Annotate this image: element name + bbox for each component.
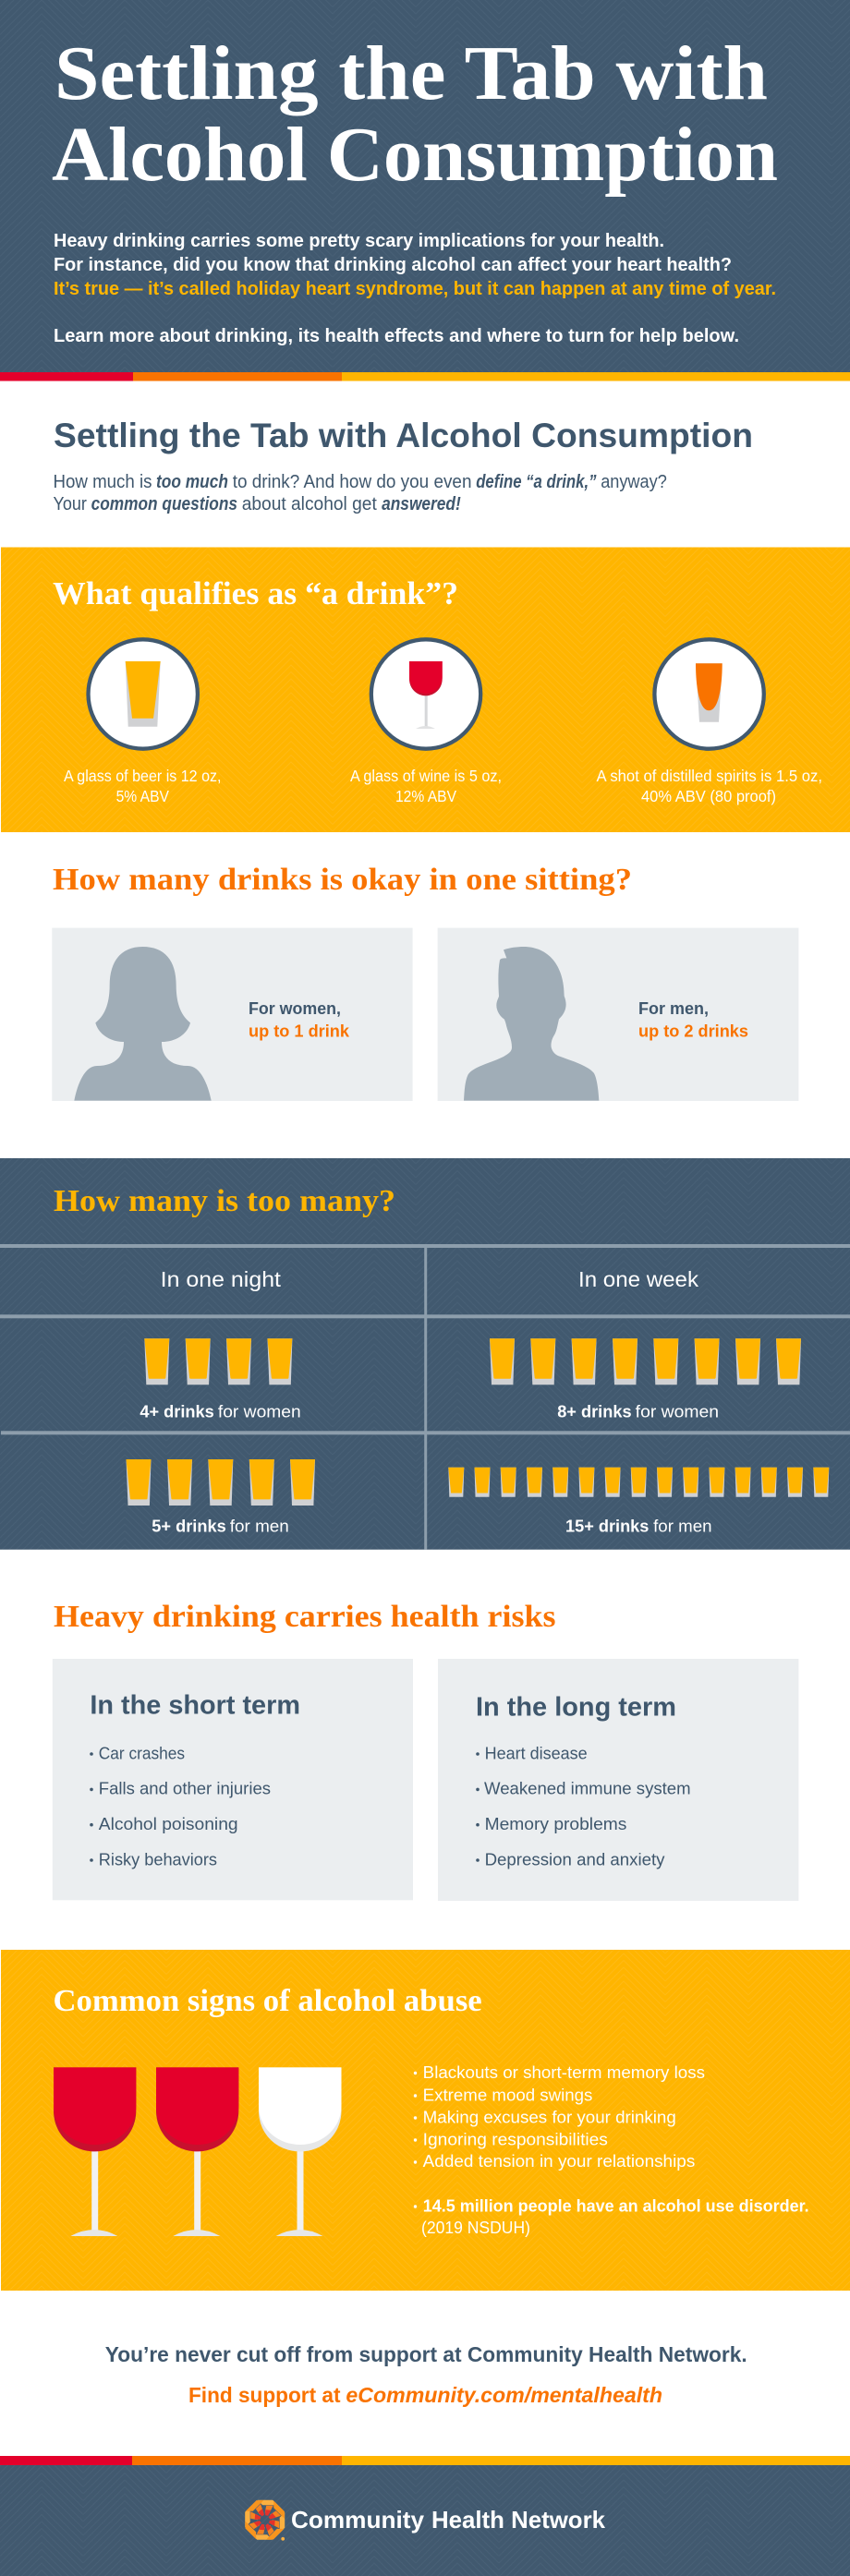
label: 5+ drinks for men: for men: [230, 1516, 289, 1535]
column heading: one week: In one week: [578, 1267, 698, 1291]
logo wordmark: [291, 2506, 606, 2534]
logo wordmark: Community: [291, 2506, 425, 2534]
caption: wine: [350, 767, 502, 805]
intro text: For instance, did you know that drinking alcohol can affect your heart health?: [54, 255, 732, 275]
icon: beer glass: [89, 639, 198, 749]
panel: women limit: [52, 928, 413, 1101]
heading: Common signs of alcohol abuse: [54, 1984, 482, 2018]
list: short term: Car crashes: [99, 1744, 185, 1762]
text: women limit: For women,: [249, 998, 341, 1018]
heading: How many is too many?: [54, 1184, 395, 1218]
intro questions text: How much is: [54, 472, 152, 492]
icon: wine glass: [371, 639, 480, 749]
label: 15+ drinks for men: 15+ drinks: [565, 1516, 649, 1535]
intro questions text: answered!: [382, 494, 461, 514]
list: short term: Falls and other injuries: [99, 1780, 271, 1798]
panel: page header: [0, 0, 850, 372]
label: 4+ drinks for women: [140, 1402, 301, 1421]
list: signs: 14.5 million people have an alcohol use disorder.: [423, 2196, 809, 2215]
glasses: 8 for women: [490, 1338, 801, 1385]
heading: settling the tab: Settling the Tab with Alcohol Consumption: [54, 416, 753, 454]
panel heading: In the short term: [90, 1691, 300, 1721]
heading: how many drinks is okay: How many drinks is okay in one sitting?: [53, 863, 632, 897]
caption: beer: [64, 767, 222, 805]
label: 8+ drinks for women: for women: [636, 1402, 719, 1421]
intro questions text: to drink? And how do you even: [233, 472, 471, 492]
intro text: Learn more about drinking, its health effects and where to turn for help below.: [54, 326, 739, 346]
list: signs: Making excuses for your drinking: [423, 2109, 676, 2127]
intro text: It’s true — it’s called holiday heart syndrome, but it can happen at any time of year.: [54, 279, 776, 299]
intro questions text: anyway?: [601, 472, 667, 492]
intro questions text: Your: [54, 494, 87, 514]
icon: red wine glass 2: [156, 2067, 238, 2236]
label: 4+ drinks for women: for women: [218, 1402, 301, 1421]
icon: man silhouette: [464, 947, 599, 1101]
intro questions text: too much: [156, 472, 228, 492]
call to action: Find support at: [188, 2383, 341, 2407]
list: long term: Heart disease: [485, 1744, 588, 1762]
glasses: 5 for men: [126, 1459, 315, 1506]
glasses: 4 for women: [144, 1338, 292, 1385]
caption: spirits: 40% ABV (80 proof): [641, 787, 776, 805]
label: 15+ drinks for men: [565, 1516, 711, 1535]
panel: short term risks: [53, 1659, 413, 1900]
list: short term: Risky behaviors: [99, 1850, 217, 1869]
label: 15+ drinks for men: for men: [653, 1516, 711, 1535]
list: long term: [476, 1744, 691, 1869]
label: 8+ drinks for women: [557, 1402, 719, 1421]
list: short term: [90, 1744, 271, 1869]
caption: wine: 12% ABV: [395, 787, 456, 805]
colour stripe: bottom: [0, 2456, 850, 2465]
icon: red wine glass 1: [54, 2067, 136, 2236]
call to action: eCommunity.com/mentalhealth: [346, 2383, 662, 2407]
panel: long term risks: [438, 1659, 798, 1901]
caption: beer: A glass of beer is 12 oz,: [64, 767, 222, 785]
text: men limit: [638, 998, 748, 1041]
caption: beer: 5% ABV: [116, 787, 169, 805]
intro questions text: define “a drink,”: [476, 472, 597, 492]
panel: how many is too many: [0, 1158, 850, 1550]
icon: shot glass: [654, 639, 764, 749]
list: long term: Memory problems: [485, 1815, 626, 1833]
heading: health risks: Heavy drinking carries health risks: [54, 1600, 556, 1634]
call to action: [188, 2383, 662, 2407]
intro questions text: common questions: [91, 494, 237, 514]
list: long term: Weakened immune system: [484, 1780, 691, 1798]
icon: network logo: [242, 2497, 288, 2543]
glasses: 15 for men: [448, 1468, 829, 1497]
list: signs: (2019 NSDUH): [421, 2219, 530, 2237]
intro questions text: about alcohol get: [242, 494, 377, 514]
title: Settling the Tab with: [55, 30, 768, 116]
panel: what qualifies as a drink: [1, 547, 850, 832]
label: 4+ drinks for women: 4+ drinks: [140, 1402, 214, 1421]
icon: woman silhouette: [74, 947, 212, 1101]
caption: wine: A glass of wine is 5 oz,: [350, 767, 502, 785]
panel heading: In the long term: [476, 1693, 676, 1723]
label: 8+ drinks for women: 8+ drinks: [557, 1402, 632, 1421]
caption: spirits: A shot of distilled spirits is 1.5 oz,: [597, 767, 822, 785]
panel: men limit: [438, 928, 798, 1101]
title: Alcohol Consumption: [52, 112, 778, 198]
text: women limit: [249, 998, 350, 1041]
list: long term: Depression and anxiety: [485, 1850, 665, 1869]
list: signs: Added tension in your relationships: [423, 2152, 695, 2171]
icon: white wine glass: [259, 2067, 342, 2236]
list: signs: [414, 2063, 809, 2237]
heading: What qualifies as “a drink”?: [53, 576, 458, 611]
intro text: Heavy drinking carries some pretty scary implications for your health.: [54, 231, 664, 251]
logo wordmark: Health Network: [431, 2506, 606, 2534]
list: signs: Extreme mood swings: [423, 2086, 592, 2104]
list: signs: Blackouts or short-term memory loss: [423, 2063, 705, 2082]
label: 5+ drinks for men: [152, 1516, 289, 1535]
text: men limit: For men,: [638, 998, 709, 1018]
panel: footer: [0, 2465, 850, 2576]
panel: signs of alcohol abuse: [1, 1950, 850, 2291]
column heading: one night: In one night: [161, 1267, 281, 1291]
closing statement: You’re never cut off from support at Community Health Network.: [105, 2342, 747, 2366]
label: 5+ drinks for men: 5+ drinks: [152, 1516, 226, 1535]
text: men limit: up to 2 drinks: [638, 1022, 748, 1041]
intro text: [54, 231, 776, 346]
text: women limit: up to 1 drink: [249, 1022, 350, 1041]
list: short term: Alcohol poisoning: [99, 1815, 238, 1833]
title: [52, 30, 778, 198]
list: signs: Ignoring responsibilities: [423, 2130, 608, 2148]
caption: spirits: [597, 767, 822, 805]
intro questions text: [54, 472, 667, 514]
colour stripe: top: [0, 372, 850, 381]
